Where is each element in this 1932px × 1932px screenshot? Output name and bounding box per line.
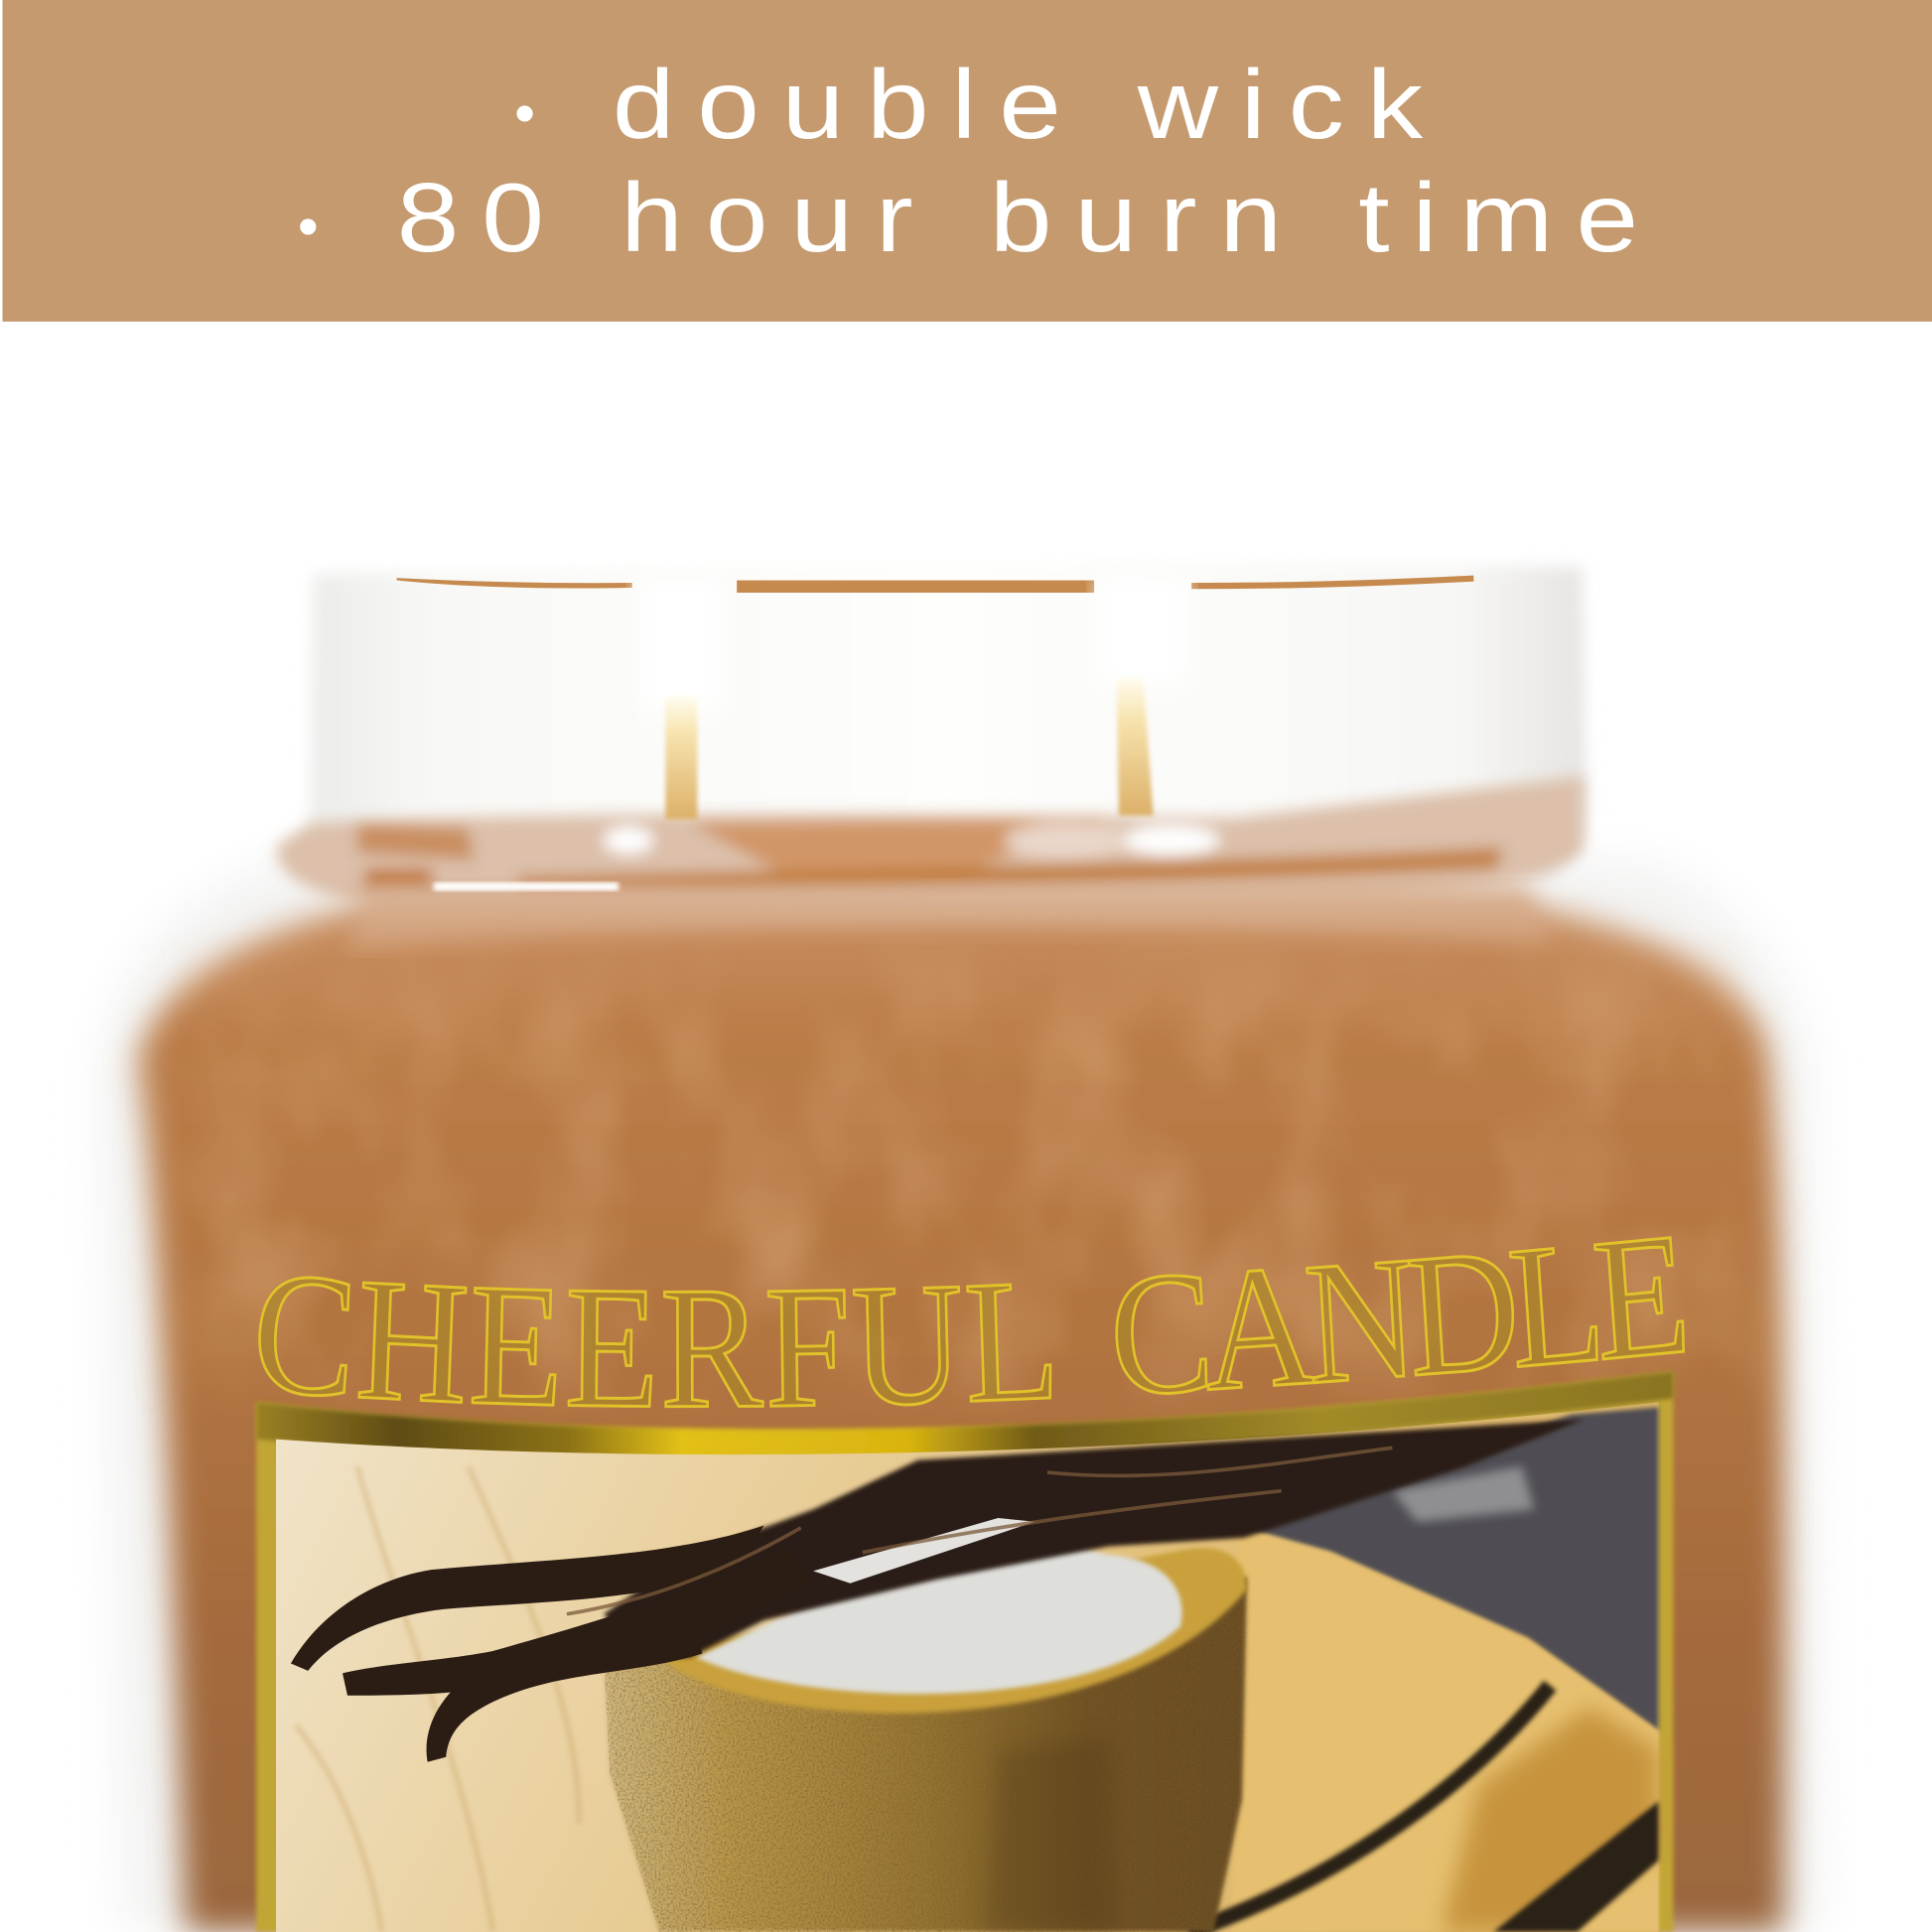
salt in cup bbox=[696, 1522, 1182, 1694]
gold frame bbox=[256, 1371, 1673, 1932]
wood grain bbox=[296, 1466, 579, 1932]
cup grain bbox=[592, 1578, 1257, 1932]
flame glow right bbox=[1099, 577, 1185, 685]
feature line: burn time: • bbox=[298, 193, 319, 259]
bean tip three bbox=[427, 1608, 702, 1762]
cup body bbox=[604, 1578, 1247, 1932]
jar neck glass bbox=[310, 563, 1587, 901]
wick left bbox=[665, 696, 697, 819]
gold band bbox=[256, 1371, 1673, 1458]
plank dark band bbox=[1493, 1801, 1658, 1932]
candle jar photo bbox=[105, 563, 1821, 1932]
bean tip two bbox=[343, 1547, 813, 1696]
plank shadow tones bbox=[1442, 1707, 1658, 1932]
flame glow left bbox=[638, 577, 722, 710]
feature line: double wick: • bbox=[514, 79, 535, 146]
bean highlights bbox=[567, 1448, 1392, 1614]
top banner with feature list bbox=[2, 0, 1932, 322]
shoulder highlight bbox=[345, 888, 1553, 949]
glass halo around jar body bbox=[101, 863, 1821, 1932]
cup rim bbox=[653, 1548, 1247, 1714]
wooden plank bbox=[1232, 1528, 1658, 1932]
brand name in gold foil: CHEERFUL CANDLE bbox=[258, 1236, 1685, 1408]
wick right bbox=[1116, 678, 1154, 816]
feature line: burn time: 80 hour burn time bbox=[397, 163, 1661, 272]
salt gap between beans bbox=[813, 1518, 1035, 1584]
melted wax pool bbox=[277, 776, 1584, 901]
wax mottling texture bbox=[185, 973, 1749, 1380]
slate highlight bbox=[1392, 1466, 1534, 1522]
bean mass bbox=[604, 1420, 1584, 1657]
feature line: double wick: double wick bbox=[613, 50, 1446, 159]
slate board bbox=[1244, 1407, 1658, 1731]
banner background bbox=[2, 0, 1932, 322]
plank dark stripe bbox=[1189, 1686, 1550, 1932]
wax seen through the rim at top bbox=[397, 577, 1472, 593]
cup dark fold bbox=[986, 1737, 1115, 1932]
bean tip one bbox=[291, 1525, 763, 1671]
wood background bbox=[276, 1402, 1658, 1932]
label panel bbox=[256, 1371, 1673, 1932]
rim reflection bbox=[434, 883, 619, 891]
vanilla beans bbox=[291, 1420, 1584, 1762]
jar body wax bbox=[138, 904, 1785, 1932]
